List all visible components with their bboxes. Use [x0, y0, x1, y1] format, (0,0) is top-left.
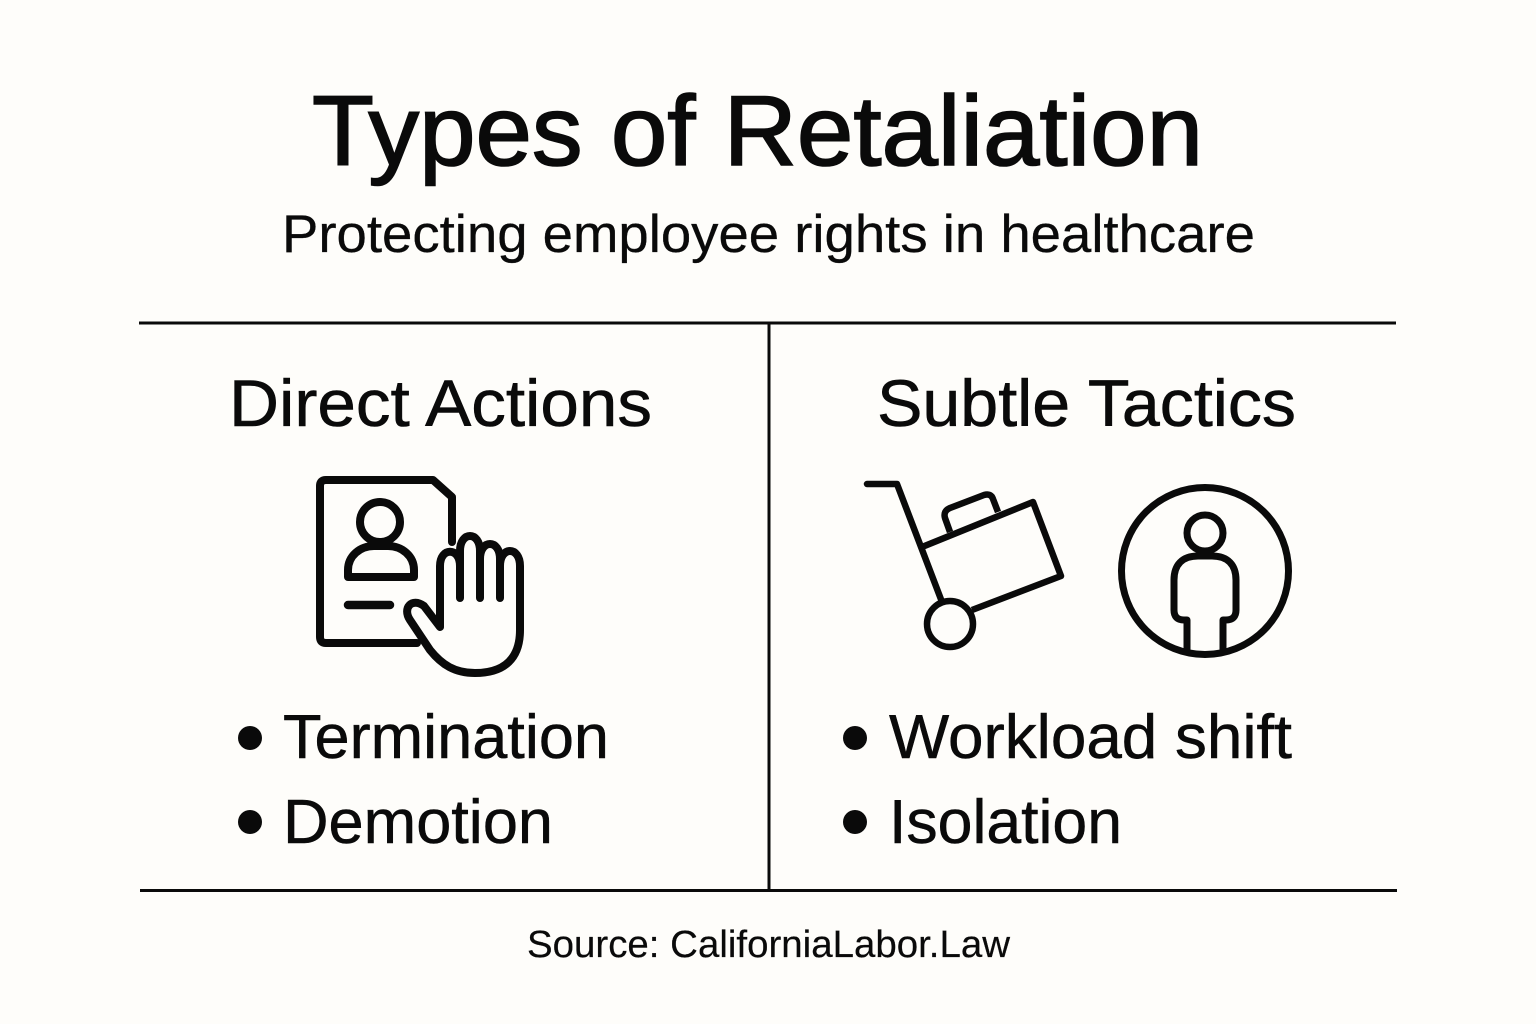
- icon: personnel document with raised hand: [320, 480, 520, 673]
- heading: direct actions: Direct Actions: [229, 366, 652, 440]
- panel: direct actions: [229, 366, 652, 857]
- icon: hand truck with briefcase: [867, 484, 1061, 647]
- bullet: isolation: Isolation: [889, 788, 1122, 857]
- heading: subtle tactics: Subtle Tactics: [877, 366, 1296, 440]
- icon: isolated person in circle: [1122, 488, 1288, 654]
- title: Types of Retaliation: [312, 75, 1203, 186]
- panel: subtle tactics: [843, 366, 1296, 857]
- bullet: workload shift: Workload shift: [889, 703, 1292, 772]
- bullet: demotion: Demotion: [283, 788, 553, 857]
- bullet: termination: Termination: [283, 703, 609, 772]
- source note: Source: CaliforniaLabor.Law: [527, 924, 1011, 966]
- subtitle: Protecting employee rights in healthcare: [282, 205, 1255, 264]
